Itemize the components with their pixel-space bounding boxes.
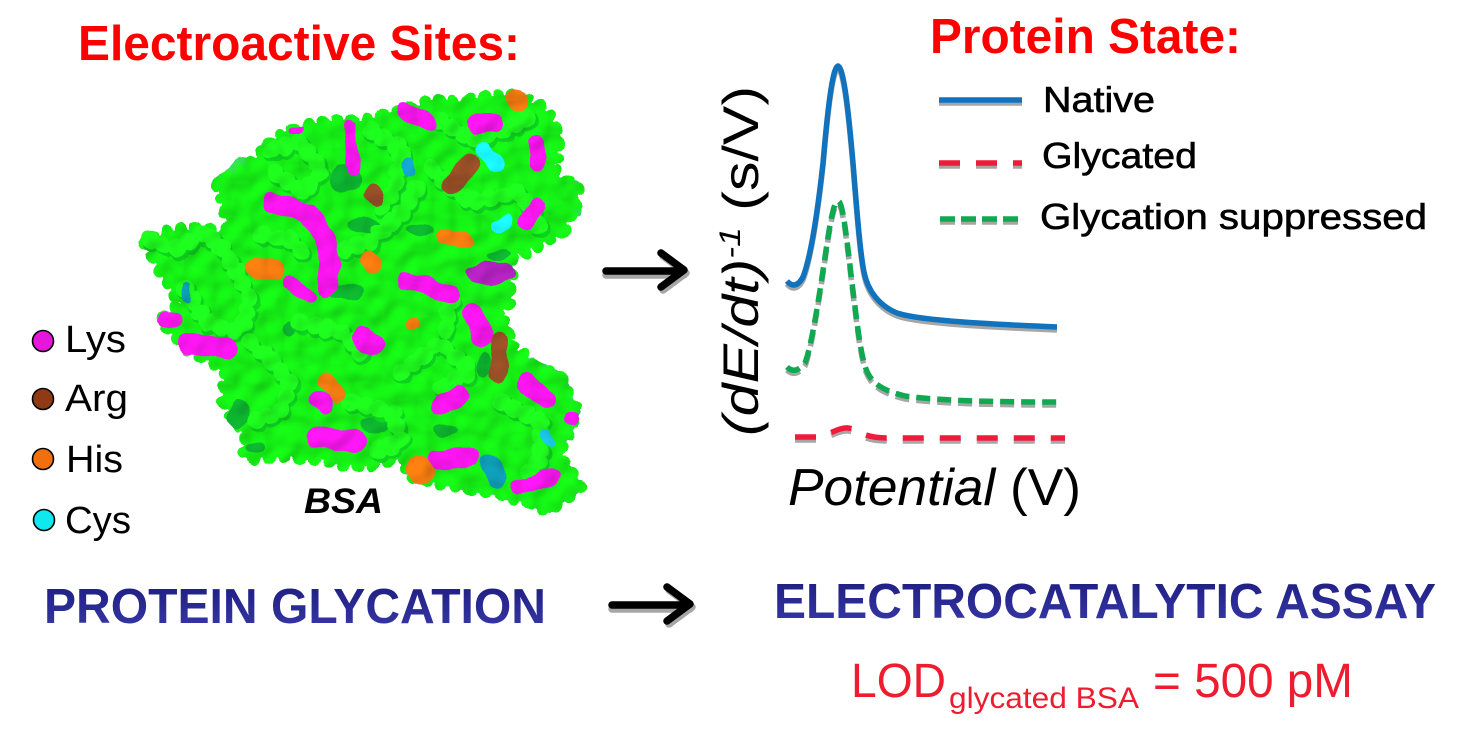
legend item: His: His: [66, 439, 123, 481]
curve shadows: [787, 69, 1057, 330]
glycation suppressed curve: [787, 201, 1057, 402]
LOD value: = 500 pM: [1153, 655, 1353, 708]
glycated curve: [795, 428, 1065, 438]
legend item: Cys: Cys: [65, 500, 131, 542]
LOD text: LOD: [851, 655, 946, 708]
main silhouette: [143, 93, 580, 510]
brown arginine patches: [373, 163, 500, 375]
x axis label: Potential (V): [788, 459, 1081, 517]
bumpy silhouette edge: [143, 93, 580, 510]
cyan cysteine patches: [186, 150, 552, 478]
y axis label: (s/V): [713, 86, 769, 227]
legend item: Arg: [32, 378, 128, 420]
protein surface model: BSA: [143, 93, 580, 510]
legend item: Lys: [32, 319, 126, 361]
title: Electroactive Sites: Electroactive Sites:: [78, 17, 520, 71]
dim magenta disc: [466, 261, 514, 285]
heading: ELECTROCATALYTIC ASSAY: ELECTROCATALYTIC ASSAY: [774, 575, 1436, 629]
y axis label: (dE/dt): [713, 259, 769, 436]
native curve: [787, 66, 1057, 327]
y axis label: -1: [714, 227, 747, 259]
lobe shading and highlights: [152, 118, 544, 483]
arrow: glycation to assay: [612, 587, 692, 624]
legend item: His: [32, 439, 123, 481]
legend item: Lys: Lys: [65, 319, 126, 361]
legend: Glycation suppressed: Glycation suppressed: [1040, 196, 1427, 237]
legend item: Arg: Arg: [65, 378, 128, 420]
orange histidine patches: [255, 98, 518, 472]
legend: Native: Native: [1043, 79, 1155, 120]
arrow: protein to curves: [606, 253, 686, 290]
rear faded lobes: [217, 150, 580, 510]
label: BSA: BSA: [304, 482, 383, 521]
LOD subscript: glycated BSA: [949, 682, 1139, 715]
legend: Glycated: Glycated: [1042, 135, 1197, 176]
chart legend: [939, 79, 1427, 237]
chart: derivative curves: [787, 66, 1065, 441]
legend: residues: [32, 319, 131, 542]
dark crevices: [227, 165, 512, 453]
title: Protein State: Protein State:: [930, 10, 1241, 64]
legend item: Cys: [34, 500, 131, 542]
heading: PROTEIN GLYCATION: PROTEIN GLYCATION: [44, 580, 546, 634]
detection limit: [851, 655, 1353, 715]
magenta lysine patches: [165, 110, 574, 487]
